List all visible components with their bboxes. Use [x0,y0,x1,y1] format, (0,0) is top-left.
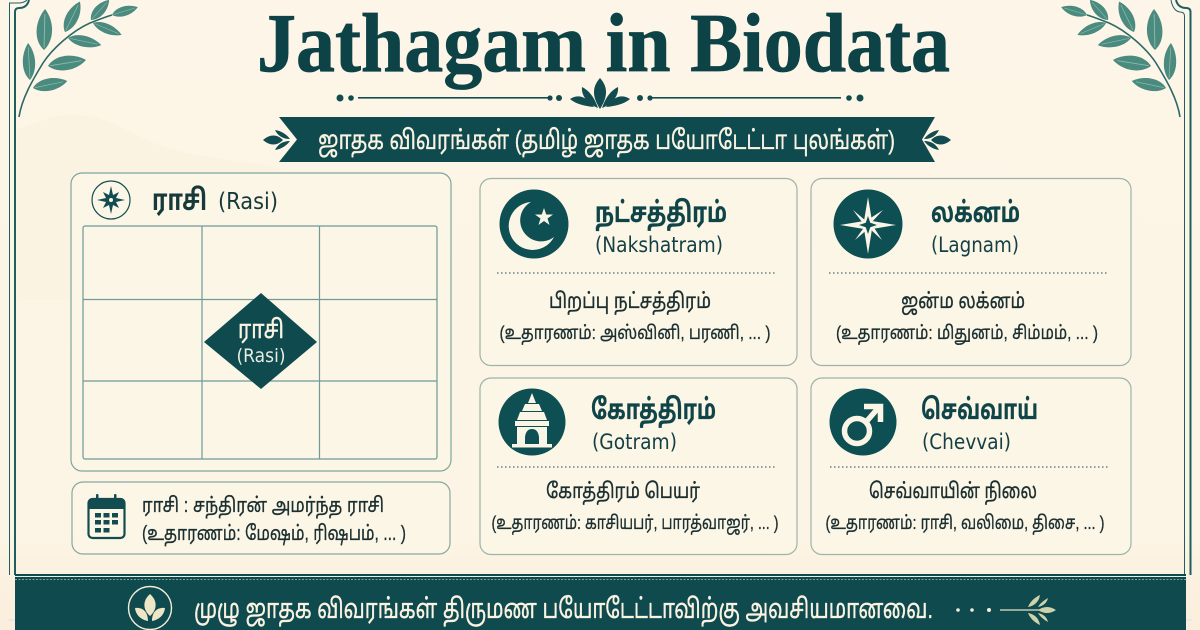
icon: calendar [88,494,125,538]
icon: mars symbol [830,388,896,456]
rasi centre diamond: (Rasi) [236,345,286,367]
subtitle ribbon [263,117,951,162]
icon: temple [498,388,566,456]
icon: rasi star [92,181,130,219]
lagnam description: ஜன்ம லக்னம் [901,290,1025,315]
nakshatram description: பிறப்பு நட்சத்திரம் [549,290,711,315]
rasi latin heading: (Rasi) [218,189,278,215]
nakshatram example: (உதாரணம்: அஸ்வினி, பரணி, ... ) [500,322,770,345]
chevvai latin: (Chevvai) [922,430,1011,454]
card: gotram [480,378,797,554]
gotram divider [497,466,777,468]
icon: crescent and star [500,190,568,258]
leaf sprig: top left [19,0,139,117]
chevvai divider [830,466,1108,468]
rasi heading: ராசி [152,185,207,217]
nakshatram heading: நட்சத்திரம் [595,197,727,231]
gotram example: (உதாரணம்: காசியபர், பாரத்வாஜர், ... ) [492,512,778,536]
card: chevvai [811,378,1131,554]
lagnam latin: (Lagnam) [931,233,1019,257]
leaf sprig: top right [1060,0,1180,117]
lagnam heading: லக்னம் [931,197,1020,228]
ribbon leaf left [263,130,290,150]
card: lagnam [811,178,1131,366]
lagnam divider [829,272,1108,274]
gotram latin: (Gotram) [592,430,677,454]
footer text: முழு ஜாதக விவரங்கள் திருமண பயோடேட்டாவிற்கு அவசியமானவை. [194,594,933,627]
rasi centre diamond: ராசி [238,316,284,344]
title divider ornament [336,78,864,109]
rasi example: (உதாரணம்: மேஷம், ரிஷபம், ... ) [142,522,406,546]
panel: rasi chart [71,173,451,471]
chevvai heading: செவ்வாய் [921,394,1038,425]
chevvai description: செவ்வாயின் நிலை [869,480,1037,505]
chevvai example: (உதாரணம்: ராசி, வலிமை, திசை, ... ) [826,512,1104,535]
rasi definition: ராசி : சந்திரன் அமர்ந்த ராசி [142,495,384,519]
ribbon leaf right [924,130,951,150]
ribbon text: ஜாதக விவரங்கள் (தமிழ் ஜாதக பயோடேட்டா புலங்கள்) [318,125,895,158]
footer dots and sprig [956,595,1056,625]
icon: footer leaves [128,586,172,630]
nakshatram latin: (Nakshatram) [595,233,723,257]
gotram heading: கோத்திரம் [591,394,716,428]
rasi grid [83,226,437,459]
panel: rasi explanation [72,482,450,554]
icon: compass star [834,190,902,258]
background hills [17,115,280,300]
card: nakshatram [480,178,797,366]
nakshatram divider [497,272,777,274]
footer band [15,574,1186,630]
gotram description: கோத்திரம் பெயர் [546,479,700,505]
rasi centre diamond [204,293,317,389]
lagnam example: (உதாரணம்: மிதுனம், சிம்மம், ... ) [836,322,1098,345]
